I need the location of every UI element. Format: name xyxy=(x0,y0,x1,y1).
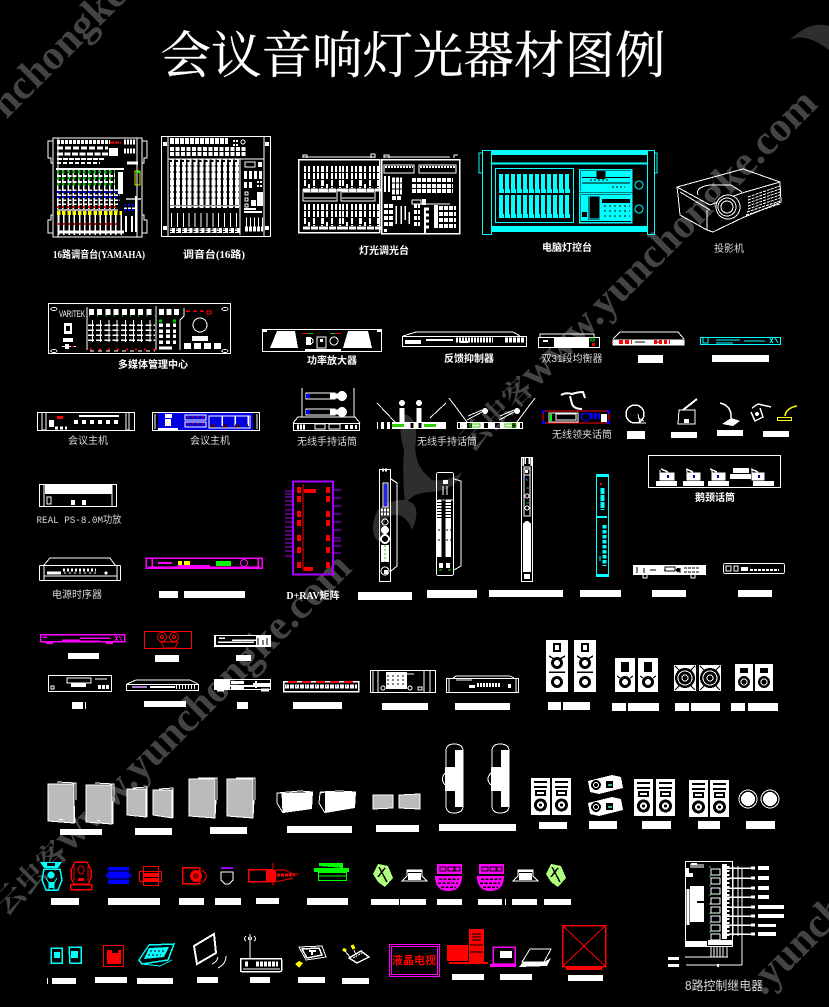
label: 16-channel mixer: 16路调音台(YAMAHA) xyxy=(53,248,145,261)
label: 无线领夹话筒 xyxy=(552,428,612,441)
DVD player xyxy=(48,676,112,709)
label: multimedia center: 多媒体管理中心 xyxy=(118,358,188,371)
grey wall speakers B xyxy=(127,787,173,835)
red round spotlight xyxy=(179,868,206,905)
rack unit with keypad xyxy=(370,670,436,710)
conference host 2 blue xyxy=(152,412,260,447)
label: power amplifier: 功率放大器 xyxy=(307,354,357,367)
slim tuner unit xyxy=(126,680,198,707)
speaker pair tall xyxy=(546,640,596,710)
red desktop PC xyxy=(447,929,488,980)
speaker pair medium xyxy=(612,658,659,711)
tilted speakers xyxy=(588,775,623,829)
column speakers xyxy=(439,744,516,831)
label: conference host: 会议主机 xyxy=(68,434,108,447)
small rack unit white B xyxy=(724,564,784,597)
green fixture xyxy=(307,863,349,905)
label: D+RAV矩阵 xyxy=(286,589,340,602)
wifi device xyxy=(342,945,369,984)
label: projector: 投影机 xyxy=(714,242,744,255)
REAL PS-8.0M amplifier xyxy=(36,484,122,527)
moving head lights cyan and red xyxy=(40,862,92,905)
cyan tablet xyxy=(137,944,174,984)
label: 无线手持话筒 xyxy=(417,435,477,448)
red tape projector box xyxy=(144,632,192,662)
label: 8-way relay: 8路控制继电器 xyxy=(685,978,763,993)
speaker pair monitor xyxy=(731,664,778,711)
small microphones set xyxy=(626,399,797,439)
white and light green fixtures xyxy=(512,864,571,905)
white wall panel with waves xyxy=(194,934,226,983)
grey wall speakers C xyxy=(189,778,255,834)
title: 会议音响灯光器材图例 xyxy=(160,16,666,88)
wireless handheld microphone 2 xyxy=(377,398,535,448)
wifi router xyxy=(240,934,282,983)
mixer: 16-channel YAMAHA xyxy=(48,138,147,261)
label: conference host: 会议主机 xyxy=(190,434,230,447)
blue and red fixtures xyxy=(106,866,162,905)
red box device xyxy=(95,946,127,983)
speaker pair woofer xyxy=(674,665,721,711)
power sequencer xyxy=(40,558,120,601)
label: 电源时序器 xyxy=(52,588,102,601)
red indicator rack unit xyxy=(612,332,684,363)
LCD TV: 液晶电视 xyxy=(392,952,436,968)
wireless handheld microphone 1 xyxy=(293,388,360,448)
redacted label xyxy=(638,355,663,363)
light green and white fixtures xyxy=(371,864,427,905)
dual 31-band equalizer xyxy=(538,334,603,365)
equalizer unit with red strips xyxy=(284,682,358,709)
cyan rack unit xyxy=(700,338,780,362)
grey wall speakers A xyxy=(48,782,114,835)
wireless lapel microphone xyxy=(542,392,612,441)
vertical rack unit 3 xyxy=(489,458,563,597)
projector xyxy=(677,169,781,255)
red long follow spot xyxy=(248,863,299,904)
grey small box speakers xyxy=(373,794,420,832)
label: dual 31 band equalizer: 双31段均衡器 xyxy=(541,352,603,365)
multimedia management center xyxy=(48,304,230,371)
cyan phones xyxy=(47,947,81,984)
feedback suppressor xyxy=(402,332,526,365)
label: lighting dimmer: 灯光调光台 xyxy=(359,244,409,257)
multimedia management center: VARITEK xyxy=(59,309,85,320)
label: 鹅颈话筒 xyxy=(695,491,735,504)
LCD TV xyxy=(390,944,440,976)
round ceiling speakers xyxy=(739,790,779,829)
white fixture with purple top xyxy=(215,867,241,905)
D+RAV matrix xyxy=(285,482,341,602)
touch panel xyxy=(295,946,326,983)
label: computer lighting console: 电脑灯控台 xyxy=(542,241,592,254)
tape deck unit xyxy=(446,676,518,710)
white box speakers xyxy=(277,791,356,833)
power amplifier xyxy=(262,330,382,367)
magenta laptop xyxy=(490,947,532,980)
cyan vertical rack unit xyxy=(580,474,621,597)
8 channel relay diagram xyxy=(668,862,784,993)
cabinet speakers pair 3 xyxy=(689,780,729,829)
label: REAL PS-8.0M功放 xyxy=(36,513,122,527)
small rack unit white A xyxy=(634,566,706,597)
conference host 1 xyxy=(38,412,134,447)
cabinet speakers pair 1 xyxy=(531,778,571,829)
mixer: 16 channel xyxy=(162,136,270,261)
label: feedback suppressor: 反馈抑制器 xyxy=(444,352,494,365)
white rack unit C xyxy=(214,635,271,661)
magenta DVD player xyxy=(40,634,124,659)
magenta rack unit xyxy=(146,558,262,598)
label: 无线手持话筒 xyxy=(297,435,357,448)
white receiver unit xyxy=(214,680,270,709)
vertical rack unit 2 xyxy=(427,472,477,598)
gooseneck microphones box xyxy=(648,456,780,504)
white laptop xyxy=(519,949,551,967)
redacted label xyxy=(712,355,769,362)
watermark bands: 云虫客www.yunchongke.com xyxy=(447,80,827,460)
cabinet speakers pair 2 xyxy=(634,779,675,829)
lighting dimmer console xyxy=(298,154,460,257)
red crossed box xyxy=(562,926,606,981)
vertical rack unit 1 xyxy=(358,470,412,600)
label: 16 channel mixer: 调音台(16路) xyxy=(183,248,245,261)
computer lighting console xyxy=(479,150,657,254)
magenta fixtures xyxy=(435,864,506,905)
